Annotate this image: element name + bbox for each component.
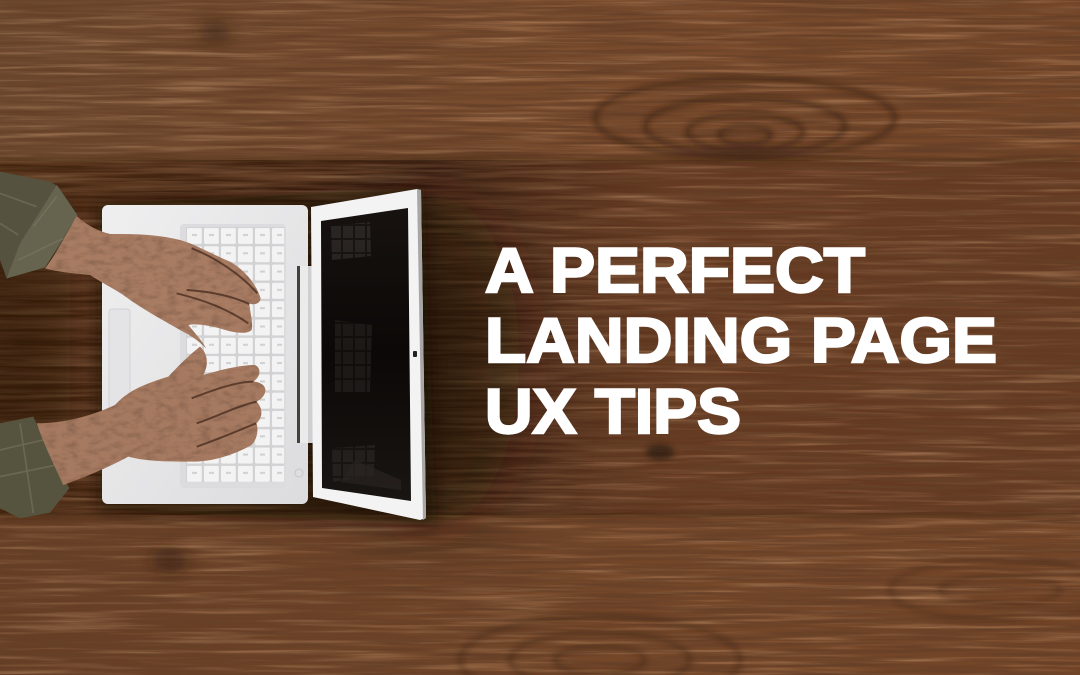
title line 1: A PERFECT bbox=[485, 236, 865, 306]
hand: lower bbox=[37, 347, 265, 485]
title line 3: UX TIPS bbox=[485, 377, 741, 447]
plank seams bbox=[0, 158, 1080, 161]
laptop bbox=[98, 187, 436, 525]
knot: centre right bbox=[646, 444, 674, 460]
upper hand knuckle lines bbox=[177, 248, 257, 323]
knot: bottom left bbox=[152, 548, 188, 572]
hands and sleeves bbox=[0, 172, 265, 518]
sleeve: upper arm bbox=[0, 172, 77, 278]
screen reflection: lid patch bbox=[340, 460, 401, 490]
keyboard well bbox=[180, 224, 286, 488]
lower hand knuckle lines bbox=[192, 382, 257, 447]
shadow near laptop bbox=[340, 190, 520, 530]
webcam bbox=[413, 351, 417, 357]
knot: bottom centre bbox=[460, 616, 740, 675]
power button bbox=[295, 469, 303, 477]
screen reflection: lower keyboard bbox=[332, 445, 375, 482]
hinge bbox=[297, 266, 314, 443]
plank: middle bbox=[0, 160, 1080, 516]
laptop screen lid bbox=[311, 189, 426, 520]
title bbox=[485, 236, 997, 447]
title line 2: LANDING PAGE bbox=[485, 306, 997, 376]
laptop drop shadow bbox=[98, 187, 436, 525]
knot: upper swirl bbox=[595, 78, 895, 158]
knot: bottom right bbox=[890, 560, 1080, 620]
shadow at left edge bbox=[0, 200, 70, 490]
hand: upper bbox=[45, 216, 261, 348]
screen reflection: middle keys bbox=[335, 320, 372, 392]
screen reflection: keyboard bbox=[331, 222, 371, 260]
plank: bottom bbox=[0, 515, 1080, 675]
knot: top left bbox=[199, 22, 231, 42]
plank: top bbox=[0, 0, 1080, 162]
keyboard keys bbox=[186, 227, 284, 482]
sleeve: lower arm bbox=[0, 417, 69, 518]
upper hand skin texture bbox=[45, 216, 261, 348]
laptop base bbox=[102, 205, 308, 504]
screen glass bbox=[321, 208, 411, 501]
lid edge bbox=[417, 189, 426, 520]
trackpad bbox=[109, 309, 130, 413]
lower hand skin texture bbox=[37, 347, 265, 485]
